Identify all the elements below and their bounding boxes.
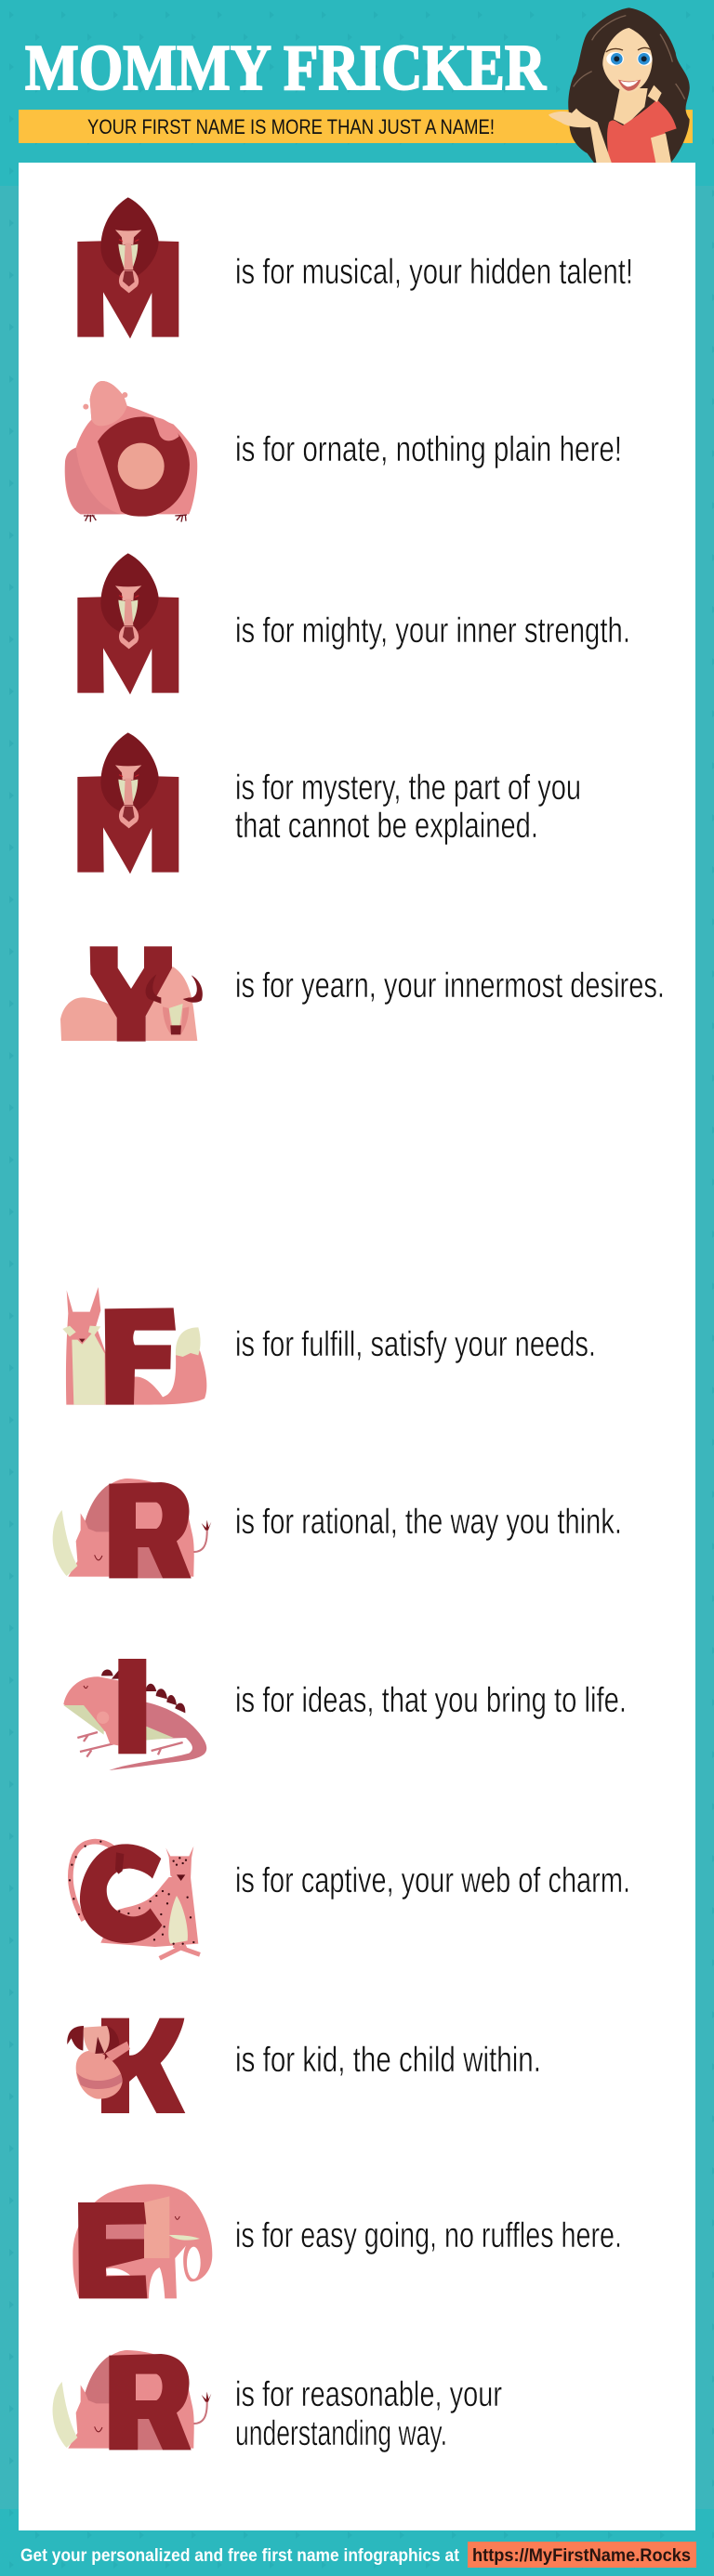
icon: elephant letter E xyxy=(73,2184,212,2299)
text: reasonable: understanding way. xyxy=(235,2414,447,2453)
icon: letter O creature xyxy=(65,381,197,522)
icon: baboon letter M xyxy=(77,197,178,338)
row I: ideas xyxy=(63,1659,627,1770)
text: mystery: is for mystery, the part of you xyxy=(235,769,581,808)
row F: fulfill xyxy=(62,1287,596,1405)
icon: fox letter F xyxy=(62,1287,206,1405)
icon: baboon letter M xyxy=(77,553,178,694)
text: reasonable xyxy=(235,2375,502,2453)
row E: easy going xyxy=(73,2184,622,2299)
row M: mighty xyxy=(77,553,630,694)
icon: rhino letter R xyxy=(53,2350,211,2450)
text: mystery: that cannot be explained. xyxy=(235,807,538,846)
icon: koala letter K xyxy=(67,2018,185,2113)
character illustration: woman xyxy=(549,7,690,164)
footer link button: https://MyFirstName.Rocks xyxy=(472,2546,691,2566)
icon: rhino letter R xyxy=(53,1479,211,1578)
row K: kid xyxy=(67,2018,541,2113)
subtitle text: YOUR FIRST NAME IS MORE THAN JUST A NAME! xyxy=(87,115,495,138)
yellow subtitle band xyxy=(19,110,693,143)
text: mystery xyxy=(235,769,581,846)
text: kid: is for kid, the child within. xyxy=(235,2041,541,2080)
row Y: yearn xyxy=(60,946,665,1042)
text: fulfill: is for fulfill, satisfy your needs. xyxy=(235,1325,596,1364)
row M: mystery xyxy=(77,732,581,874)
title: MOMMY FRICKER xyxy=(25,33,547,104)
text: reasonable: is for reasonable, your xyxy=(235,2375,502,2414)
icon: yak letter Y xyxy=(60,946,203,1042)
row R: reasonable xyxy=(53,2350,502,2453)
row O: ornate xyxy=(65,381,622,522)
footer call to action text: Get your personalized and free first name infographics at xyxy=(20,2546,460,2566)
icon: baboon letter M xyxy=(77,732,178,874)
row R: rational xyxy=(53,1479,622,1578)
icon: iguana letter I xyxy=(63,1659,206,1770)
row M: musical xyxy=(77,197,633,338)
row C: captive xyxy=(70,1842,630,1958)
icon: leopard letter C xyxy=(70,1842,200,1958)
